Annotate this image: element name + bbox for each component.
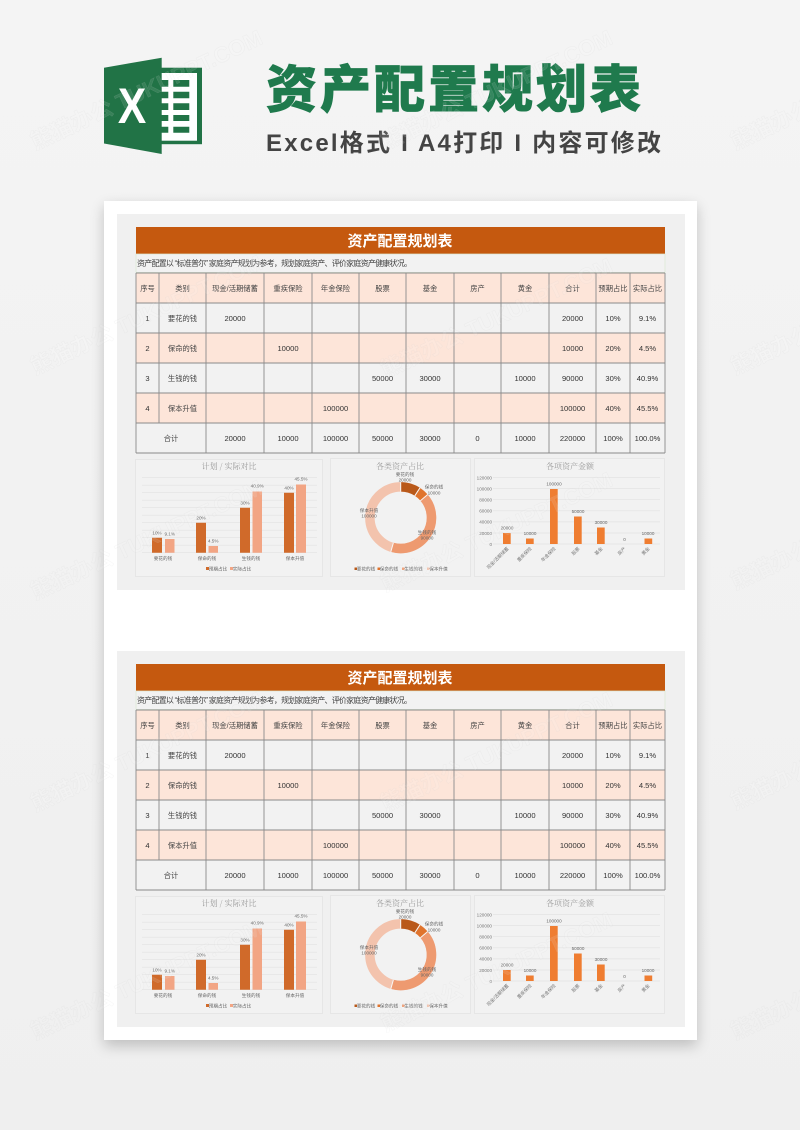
bar chart: asset amounts: 20000 <box>501 962 514 968</box>
bar chart: plan vs actual: 20% <box>196 952 206 958</box>
total row <box>164 871 661 880</box>
table header: 预期占比 <box>598 284 628 293</box>
row 1: 20000 <box>562 314 583 323</box>
row 2: 10000 <box>562 344 583 353</box>
row 3: 90000 <box>562 374 583 383</box>
table header: 年金保险 <box>321 721 351 730</box>
bar chart: plan vs actual: 要花的钱 <box>154 992 173 999</box>
bar chart: asset amounts: 80000 <box>479 498 492 502</box>
panel: sheet 1 <box>117 214 685 590</box>
row 2: 4.5% <box>639 781 656 790</box>
chart legend: 实际占比 <box>233 1002 252 1010</box>
bar chart: plan vs actual: 9.1% <box>164 532 175 536</box>
bar chart: plan vs actual: 45.5% <box>294 914 308 918</box>
row 1: 1 <box>145 314 150 323</box>
bar chart: asset amounts: 120000 <box>477 476 492 480</box>
table header <box>140 284 662 293</box>
bar chart: plan vs actual: 45.5% <box>294 476 308 482</box>
row 4: 45.5% <box>637 404 659 413</box>
text: 熊猫办公 TUKUPPT.COM <box>377 253 616 383</box>
total row: 10000 <box>277 871 299 880</box>
chart legend: 预期占比 <box>209 566 228 572</box>
row 2: 4.5% <box>639 344 656 353</box>
bar chart: plan vs actual: 40% <box>284 922 294 928</box>
description row <box>136 254 665 272</box>
bar chart: plan vs actual: 30% <box>240 500 250 506</box>
bar chart: plan vs actual: 4.5% <box>208 976 218 980</box>
donut chart: asset share: 各类资产占比 <box>376 461 424 472</box>
total row: 30000 <box>419 871 441 880</box>
bar chart: asset amounts: 黄金 <box>640 545 652 557</box>
bar chart: asset amounts: 现金/活期储蓄 <box>485 982 511 1008</box>
bar chart: plan vs actual: 40% <box>284 486 294 490</box>
donut chart: asset share: 保本升值 <box>360 507 379 514</box>
row 3: 30% <box>605 811 621 820</box>
donut chart: asset share: 要花的钱 <box>396 908 415 915</box>
table header: 类别 <box>175 721 190 730</box>
row 1: 20000 <box>224 751 246 760</box>
row 3 <box>145 811 659 820</box>
row 1: 10% <box>605 314 621 323</box>
total row: 100% <box>603 434 623 443</box>
row 1: 要花的钱 <box>168 314 197 323</box>
bar chart: plan vs actual: 要花的钱 <box>154 555 173 562</box>
icon: excel logo: X <box>118 78 146 134</box>
chart legend: 保命的钱 <box>380 566 399 572</box>
bar chart: asset amounts: 年金保险 <box>539 982 558 1000</box>
row 4: 100000 <box>560 404 585 413</box>
bar chart: asset amounts <box>474 896 664 1014</box>
chart legend: 保本升值 <box>429 566 448 572</box>
chart legend: 生钱的钱 <box>404 566 423 572</box>
donut chart: asset share: 20000 <box>399 478 412 482</box>
total row: 20000 <box>224 434 246 443</box>
bar chart: plan vs actual: 保本升值 <box>286 992 305 999</box>
row 2: 保命的钱 <box>168 781 197 790</box>
row 1: 1 <box>145 751 150 760</box>
bar chart: asset amounts: 股票 <box>571 983 582 994</box>
row 2: 20% <box>605 781 621 790</box>
donut chart: asset share: 90000 <box>421 536 434 540</box>
row 1: 9.1% <box>639 751 656 760</box>
row 2 <box>145 781 656 790</box>
table header: 合计 <box>565 284 580 293</box>
row 4: 4 <box>145 841 150 850</box>
bar chart: plan vs actual: 9.1% <box>164 968 175 974</box>
donut chart: asset share: 保本升值 <box>360 944 379 951</box>
bar chart: asset amounts: 20000 <box>479 531 492 536</box>
row 3: 30% <box>605 374 621 383</box>
table header: 基金 <box>423 721 438 730</box>
bar chart: asset amounts: 0 <box>623 974 626 979</box>
total row: 10000 <box>514 434 536 443</box>
donut chart: asset share <box>330 896 470 1014</box>
row 2: 10000 <box>562 781 583 790</box>
bar chart: asset amounts: 股票 <box>571 546 582 557</box>
donut chart: asset share: 生钱的钱 <box>418 529 437 536</box>
chart legend <box>354 566 448 572</box>
total row: 10000 <box>277 434 299 443</box>
chart legend: 保命的钱 <box>380 1002 399 1010</box>
donut chart: asset share: 90000 <box>421 972 434 978</box>
description row: 资产配置以 “标准普尔” 家庭资产规划为参考，规划家庭资产、评价家庭资产健康状况。 <box>137 695 412 705</box>
table header: 合计 <box>565 721 580 730</box>
total row: 100000 <box>323 871 348 880</box>
bar chart: asset amounts: 各项资产金额 <box>546 898 595 909</box>
table header: 黄金 <box>518 721 533 730</box>
bar chart: asset amounts: 0 <box>489 542 492 547</box>
row 4: 100000 <box>560 841 585 850</box>
chart legend <box>354 1002 448 1010</box>
donut chart: asset share: 10000 <box>428 928 441 932</box>
row 4: 4 <box>145 404 150 413</box>
table <box>136 710 665 890</box>
row 3 <box>145 374 659 383</box>
bar chart: asset amounts: 各项资产金额 <box>546 461 595 472</box>
bar chart: asset amounts: 黄金 <box>640 982 652 994</box>
panel: white card <box>104 201 697 1040</box>
chart legend: 生钱的钱 <box>404 1002 423 1010</box>
donut chart: asset share: 20000 <box>399 914 412 920</box>
table <box>136 273 665 453</box>
text: 熊猫办公 TUKUPPT.COM <box>377 687 616 817</box>
row 4 <box>145 404 659 413</box>
text: 熊猫办公 TUKUPPT.COM <box>377 25 616 155</box>
bar chart: asset amounts: 基金 <box>593 982 604 993</box>
sheet heading: 资产配置规划表 <box>347 232 453 250</box>
bar chart: plan vs actual: 20% <box>196 516 206 520</box>
table header: 序号 <box>140 721 155 730</box>
row 4: 100000 <box>323 404 348 413</box>
bar chart: asset amounts: 0 <box>623 537 626 542</box>
bar chart: plan vs actual: 计划 / 实际对比 <box>202 898 256 909</box>
table header: 基金 <box>423 284 438 293</box>
chart legend <box>206 566 252 572</box>
total row: 220000 <box>560 871 585 880</box>
total row: 100% <box>603 871 623 880</box>
donut chart: asset share: 生钱的钱 <box>418 966 437 973</box>
bar chart: asset amounts: 20000 <box>501 526 514 530</box>
description row: 资产配置以 “标准普尔” 家庭资产规划为参考，规划家庭资产、评价家庭资产健康状况。 <box>137 258 412 268</box>
total row: 50000 <box>372 434 393 443</box>
row 3: 30000 <box>419 374 441 383</box>
bar chart: asset amounts: 10000 <box>524 531 537 536</box>
bar chart: asset amounts: 10000 <box>524 968 537 973</box>
table header: 实际占比 <box>633 721 662 730</box>
row 4: 100000 <box>323 841 348 850</box>
bar chart: plan vs actual: 30% <box>240 938 250 942</box>
bar chart: plan vs actual: 10% <box>152 530 162 536</box>
row 2 <box>145 344 656 353</box>
row 4: 45.5% <box>637 841 659 850</box>
row 2: 20% <box>605 344 621 353</box>
row 3: 90000 <box>562 811 583 820</box>
text: 熊猫办公 TUKUPPT.COM <box>27 475 266 605</box>
bar chart: asset amounts: 40000 <box>479 520 492 524</box>
sheet heading <box>136 664 665 691</box>
row 2: 保命的钱 <box>168 344 197 353</box>
bar chart: asset amounts: 100000 <box>546 482 562 486</box>
row 2: 10000 <box>277 344 299 353</box>
row 2: 10000 <box>277 781 299 790</box>
table header: 房产 <box>470 284 485 293</box>
row 4: 保本升值 <box>168 841 197 850</box>
donut chart: asset share: 100000 <box>361 950 377 956</box>
sheet heading <box>136 227 665 254</box>
bar chart: asset amounts: 60000 <box>479 946 492 950</box>
text: 熊猫办公 TUKUPPT.COM <box>27 687 266 817</box>
row 3: 生钱的钱 <box>168 811 197 820</box>
chart legend: 要花的钱 <box>357 566 376 572</box>
row 4: 40% <box>605 404 621 413</box>
bar chart: asset amounts: 100000 <box>477 486 492 492</box>
total row: 220000 <box>560 434 585 443</box>
donut chart: asset share: 各类资产占比 <box>376 898 424 909</box>
text: 熊猫办公 TUKUPPT.COM <box>27 250 266 380</box>
chart legend <box>206 1002 252 1010</box>
donut chart: asset share: 要花的钱 <box>396 471 415 478</box>
total row: 20000 <box>224 871 246 880</box>
donut chart: asset share: 保命的钱 <box>425 920 444 928</box>
chart legend: 要花的钱 <box>357 1002 376 1010</box>
text: 熊猫办公 TUKUPPT.COM <box>27 25 266 155</box>
table header: 实际占比 <box>633 284 662 293</box>
row 1 <box>145 314 656 323</box>
bar chart: asset amounts: 重疾保险 <box>515 545 534 563</box>
total row: 100.0% <box>635 434 661 443</box>
table header: 股票 <box>375 721 390 730</box>
row 3: 50000 <box>372 374 393 383</box>
bar chart: asset amounts: 50000 <box>572 946 585 951</box>
bar chart: asset amounts: 100000 <box>477 924 492 928</box>
bar chart: asset amounts: 50000 <box>572 509 585 514</box>
row 3: 10000 <box>514 374 536 383</box>
total row: 30000 <box>419 434 441 443</box>
subtitle: Excel格式 I A4打印 I 内容可修改 <box>266 130 661 157</box>
row 3: 40.9% <box>637 811 659 820</box>
bar chart: asset amounts: 30000 <box>595 520 608 525</box>
row 4 <box>145 841 659 850</box>
row 4: 保本升值 <box>168 404 197 413</box>
row 3: 50000 <box>372 811 393 820</box>
bar chart: asset amounts: 房产 <box>616 982 628 994</box>
chart legend: 保本升值 <box>429 1002 448 1010</box>
sheet heading: 资产配置规划表 <box>347 669 453 687</box>
bar chart: plan vs actual <box>136 896 322 1014</box>
bar chart: asset amounts: 30000 <box>595 957 608 962</box>
description row <box>136 691 665 710</box>
row 2: 2 <box>145 344 150 353</box>
bar chart: asset amounts: 基金 <box>593 545 604 556</box>
total row: 100000 <box>323 434 348 443</box>
bar chart: plan vs actual: 10% <box>152 968 162 972</box>
bar chart: plan vs actual <box>136 460 322 576</box>
table header: 序号 <box>140 284 155 293</box>
chart legend: 预期占比 <box>209 1002 228 1010</box>
table header: 股票 <box>375 284 390 293</box>
total row: 0 <box>475 871 480 880</box>
bar chart: plan vs actual: 4.5% <box>208 538 218 544</box>
table header: 房产 <box>470 721 485 730</box>
row 3: 3 <box>145 374 150 383</box>
bar chart: plan vs actual: 保命的钱 <box>198 992 217 999</box>
row 1 <box>145 751 656 760</box>
donut chart: asset share: 100000 <box>361 514 377 518</box>
table header: 重疾保险 <box>273 721 303 730</box>
bar chart: asset amounts: 60000 <box>479 508 492 514</box>
bar chart: asset amounts: 100000 <box>546 918 562 924</box>
bar chart: asset amounts: 120000 <box>477 912 492 918</box>
table header: 年金保险 <box>321 284 351 293</box>
row 3: 3 <box>145 811 150 820</box>
bar chart: asset amounts: 0 <box>489 979 492 984</box>
table header <box>140 721 662 730</box>
total row: 50000 <box>372 871 393 880</box>
row 1: 9.1% <box>639 314 656 323</box>
text: 熊猫办公 TUKUPPT.COM <box>27 915 266 1045</box>
total row <box>164 434 661 443</box>
row 4: 40% <box>605 841 621 850</box>
row 1: 20000 <box>562 751 583 760</box>
panel: sheet 2 <box>117 651 685 1027</box>
total row: 合计 <box>164 434 178 443</box>
row 3: 生钱的钱 <box>168 374 197 383</box>
bar chart: plan vs actual: 保本升值 <box>286 555 305 562</box>
bar chart: plan vs actual: 生钱的钱 <box>242 555 261 562</box>
row 3: 40.9% <box>637 374 659 383</box>
bar chart: asset amounts: 重疾保险 <box>515 982 534 1000</box>
bar chart: asset amounts <box>474 458 664 576</box>
card shadow <box>104 206 697 1046</box>
bar chart: asset amounts: 10000 <box>642 531 655 536</box>
table header: 重疾保险 <box>273 284 303 293</box>
table header: 黄金 <box>518 284 533 293</box>
row 2: 2 <box>145 781 150 790</box>
chart legend: 实际占比 <box>233 566 252 572</box>
row 3: 10000 <box>514 811 536 820</box>
text: 熊猫办公 TUKUPPT.COM <box>377 467 616 597</box>
bar chart: asset amounts: 40000 <box>479 956 492 962</box>
bar chart: plan vs actual: 计划 / 实际对比 <box>202 461 256 472</box>
total row: 10000 <box>514 871 536 880</box>
donut chart: asset share <box>330 458 470 576</box>
row 3: 30000 <box>419 811 441 820</box>
bar chart: plan vs actual: 40.9% <box>251 920 264 926</box>
donut chart: asset share: 10000 <box>428 490 441 496</box>
bar chart: asset amounts: 10000 <box>642 968 655 973</box>
bar chart: plan vs actual: 40.9% <box>251 484 264 488</box>
bar chart: asset amounts: 80000 <box>479 934 492 940</box>
icon: excel logo <box>104 58 202 154</box>
table header: 预期占比 <box>598 721 628 730</box>
bar chart: asset amounts: 现金/活期储蓄 <box>485 545 511 571</box>
bar chart: asset amounts: 20000 <box>479 968 492 973</box>
title: 资产配置规划表 <box>266 48 641 122</box>
bar chart: plan vs actual: 保命的钱 <box>198 555 217 562</box>
bar chart: asset amounts: 年金保险 <box>539 545 558 563</box>
donut chart: asset share: 保命的钱 <box>425 484 444 490</box>
row 1: 10% <box>605 751 621 760</box>
total row: 0 <box>475 434 480 443</box>
row 1: 要花的钱 <box>168 751 197 760</box>
bar chart: asset amounts: 房产 <box>616 545 628 557</box>
total row: 合计 <box>164 871 178 880</box>
table header: 类别 <box>175 284 190 293</box>
text: 熊猫办公 TUKUPPT.COM <box>377 907 616 1037</box>
table header: 现金/活期储蓄 <box>212 721 258 730</box>
total row: 100.0% <box>635 871 661 880</box>
row 1: 20000 <box>224 314 246 323</box>
table header: 现金/活期储蓄 <box>212 284 258 293</box>
bar chart: plan vs actual: 生钱的钱 <box>242 992 261 999</box>
